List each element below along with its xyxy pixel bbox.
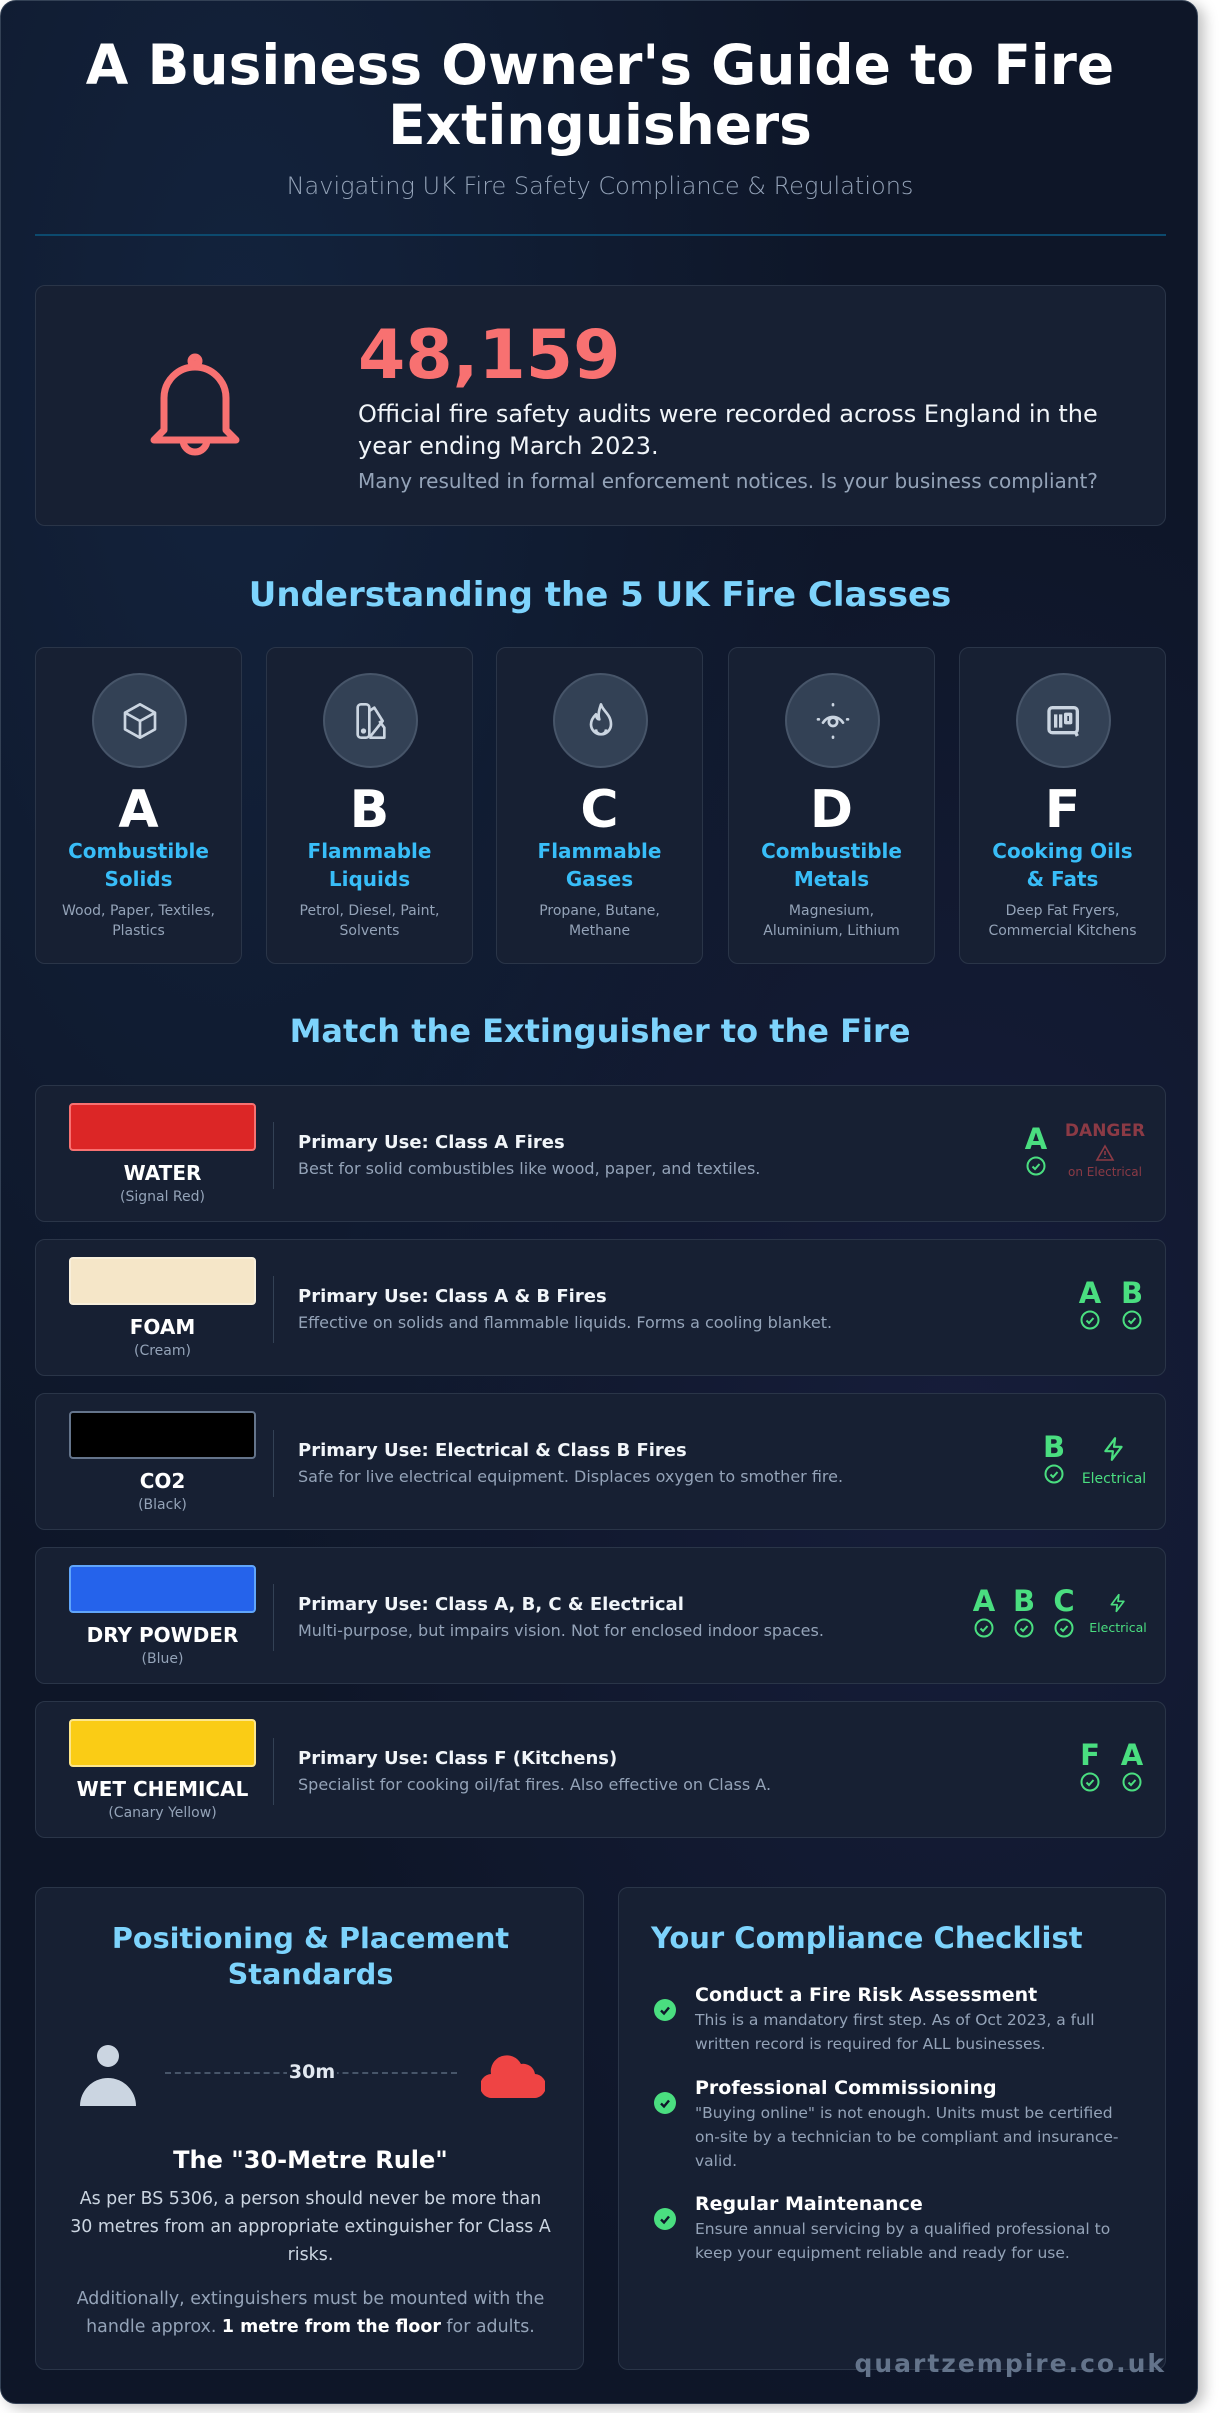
panel: class D: Aluminium, Lithium bbox=[763, 923, 900, 939]
row: wet chemical: (Canary Yellow) bbox=[108, 1805, 217, 1821]
badges: co2: Electrical bbox=[1082, 1471, 1146, 1487]
icon: flame bbox=[553, 673, 648, 768]
heading: positioning: Positioning & Placement bbox=[112, 1921, 509, 1955]
panel: class A: A bbox=[118, 780, 159, 840]
badges: foam: B bbox=[1121, 1276, 1143, 1310]
row: water: Primary Use: Class A Fires bbox=[298, 1132, 565, 1153]
icon: liquids bbox=[323, 673, 418, 768]
badges: co2 bbox=[1043, 1430, 1146, 1487]
icon: metals bbox=[785, 673, 880, 768]
row: water: WATER bbox=[124, 1161, 201, 1185]
item: commissioning: "Buying online" is not enough. Units must be certified on-site by a technician to be compliant and insurance-valid. bbox=[695, 2104, 1118, 2170]
row: wet chemical: Specialist for cooking oil/fat fires. Also effective on Class A. bbox=[298, 1775, 771, 1794]
heading: fire classes: Understanding the 5 UK Fire Classes bbox=[249, 575, 951, 615]
panel: statistic bbox=[35, 285, 1166, 526]
stat description: year ending March 2023. bbox=[358, 432, 659, 460]
row: wet chemical: WET CHEMICAL bbox=[77, 1777, 248, 1801]
row: co2: Primary Use: Electrical & Class B Fires bbox=[298, 1440, 687, 1461]
row: water: (Signal Red) bbox=[120, 1189, 205, 1205]
row: water bbox=[35, 1085, 1166, 1222]
row: foam: Primary Use: Class A & B Fires bbox=[298, 1286, 607, 1307]
item: commissioning bbox=[654, 2077, 1118, 2170]
title: A Business Owner's Guide to Fire bbox=[86, 33, 1114, 97]
badges: water: DANGER bbox=[1065, 1121, 1145, 1141]
panel: class F: Commercial Kitchens bbox=[988, 923, 1137, 939]
diagram: 30 metre distance bbox=[80, 2045, 545, 2106]
panel: class B: Solvents bbox=[340, 923, 399, 939]
badges: foam: A bbox=[1079, 1276, 1101, 1310]
row: co2: (Black) bbox=[138, 1497, 187, 1513]
icon: extinguisher cloud bbox=[481, 2055, 545, 2098]
badges: water: on Electrical bbox=[1068, 1165, 1142, 1179]
item: commissioning: Professional Commissioning bbox=[695, 2077, 997, 2099]
panel: class B: Flammable bbox=[308, 839, 431, 863]
stat description: Official fire safety audits were recorded across England in the bbox=[358, 400, 1098, 428]
badges: wet chemical: A bbox=[1121, 1738, 1143, 1772]
panel: class C: Methane bbox=[569, 923, 630, 939]
row: dry powder: (Blue) bbox=[142, 1651, 183, 1667]
panel: class B: Petrol, Diesel, Paint, bbox=[300, 903, 439, 919]
panel: class C: Flammable bbox=[538, 839, 661, 863]
panel: class F: & Fats bbox=[1027, 867, 1098, 891]
icon: person bbox=[80, 2045, 136, 2106]
heading: 30 metre rule: The "30-Metre Rule" bbox=[173, 2146, 448, 2174]
badges: dry powder: Electrical bbox=[1089, 1620, 1147, 1635]
panel: class F bbox=[959, 647, 1166, 964]
row: co2: CO2 bbox=[140, 1469, 185, 1493]
panel: class A bbox=[35, 647, 242, 964]
item: maintenance: Regular Maintenance bbox=[695, 2193, 923, 2215]
panel: class D: Combustible bbox=[761, 839, 902, 863]
panel: class F: F bbox=[1045, 780, 1080, 840]
badges: dry powder: C bbox=[1053, 1584, 1075, 1618]
icon: fryer bbox=[1016, 673, 1111, 768]
stat note: Many resulted in formal enforcement notices. Is your business compliant? bbox=[358, 469, 1098, 493]
panel: positioning bbox=[35, 1887, 584, 2370]
heading: checklist: Your Compliance Checklist bbox=[651, 1921, 1083, 1955]
text: rule: As per BS 5306, a person should never be more than 30 metres from an appropriate extinguisher for Class A risks. bbox=[70, 2189, 551, 2265]
row: foam: Effective on solids and flammable liquids. Forms a cooling blanket. bbox=[298, 1313, 832, 1332]
stat number: 48,159 bbox=[358, 316, 620, 395]
item: risk assessment bbox=[654, 1984, 1095, 2053]
panel: class C bbox=[496, 647, 703, 964]
panel: class C: C bbox=[580, 780, 619, 840]
panel: class D: D bbox=[810, 780, 853, 840]
label: 30m: 30m bbox=[289, 2061, 335, 2083]
title: Extinguishers bbox=[388, 93, 812, 157]
title bbox=[86, 33, 1114, 157]
row: co2: Safe for live electrical equipment. Displaces oxygen to smother fire. bbox=[298, 1467, 843, 1486]
badges: water bbox=[1024, 1121, 1145, 1179]
panel: class C: Propane, Butane, bbox=[539, 903, 660, 919]
row: foam: FOAM bbox=[130, 1315, 195, 1339]
row: dry powder bbox=[35, 1547, 1166, 1684]
text: mounting: Additionally, extinguishers must be mounted with the handle approx. 1 metre from the floor for adults. bbox=[77, 2289, 544, 2337]
row: foam bbox=[35, 1239, 1166, 1376]
panel: class F: Cooking Oils bbox=[992, 839, 1133, 863]
row: dry powder: Multi-purpose, but impairs vision. Not for enclosed indoor spaces. bbox=[298, 1621, 824, 1640]
row: wet chemical: Primary Use: Class F (Kitchens) bbox=[298, 1748, 617, 1769]
subtitle: Navigating UK Fire Safety Compliance & Regulations bbox=[287, 172, 913, 200]
panel: class D: Metals bbox=[794, 867, 869, 891]
heading: positioning: Standards bbox=[228, 1957, 393, 1991]
panel: class A: Solids bbox=[104, 867, 173, 891]
panel: class B bbox=[266, 647, 473, 964]
row: co2 bbox=[35, 1393, 1166, 1530]
badges: co2: B bbox=[1043, 1430, 1065, 1464]
icon: box bbox=[92, 673, 187, 768]
badges: wet chemical: F bbox=[1080, 1738, 1100, 1772]
row: water: Best for solid combustibles like wood, paper, and textiles. bbox=[298, 1159, 760, 1178]
item: risk assessment: This is a mandatory first step. As of Oct 2023, a full written record is required for ALL businesses. bbox=[695, 2011, 1095, 2053]
item: maintenance bbox=[654, 2193, 1110, 2262]
badges: wet chemical bbox=[1080, 1738, 1143, 1792]
badges: foam bbox=[1078, 1276, 1143, 1330]
heading: match extinguisher: Match the Extinguisher to the Fire bbox=[290, 1012, 910, 1050]
panel: class A: Wood, Paper, Textiles, bbox=[62, 903, 215, 919]
panel: class F: Deep Fat Fryers, bbox=[1006, 903, 1119, 919]
badges: dry powder: A bbox=[973, 1584, 995, 1618]
panel: checklist bbox=[618, 1887, 1166, 2370]
panel: class D: Magnesium, bbox=[789, 903, 874, 919]
row: foam: (Cream) bbox=[134, 1343, 191, 1359]
heading: positioning bbox=[112, 1921, 509, 1991]
badges: water: A bbox=[1025, 1122, 1047, 1156]
row: dry powder: Primary Use: Class A, B, C & Electrical bbox=[298, 1594, 684, 1615]
badges: dry powder bbox=[972, 1584, 1147, 1638]
row: dry powder: DRY POWDER bbox=[87, 1623, 238, 1647]
item: risk assessment: Conduct a Fire Risk Assessment bbox=[695, 1984, 1037, 2006]
panel: class C: Gases bbox=[566, 867, 633, 891]
panel: class B: Liquids bbox=[329, 867, 410, 891]
badges: dry powder: B bbox=[1013, 1584, 1035, 1618]
panel: class A: Plastics bbox=[112, 923, 165, 939]
item: maintenance: Ensure annual servicing by a qualified professional to keep your equipment reliable and ready for use. bbox=[695, 2220, 1110, 2262]
panel: class A: Combustible bbox=[68, 839, 209, 863]
row: wet chemical bbox=[35, 1701, 1166, 1838]
watermark: quartzempire.co.uk bbox=[854, 2349, 1166, 2378]
stat description bbox=[358, 400, 1098, 460]
panel: class D bbox=[728, 647, 935, 964]
icon: bell bbox=[150, 354, 240, 456]
panel: class B: B bbox=[350, 780, 389, 840]
